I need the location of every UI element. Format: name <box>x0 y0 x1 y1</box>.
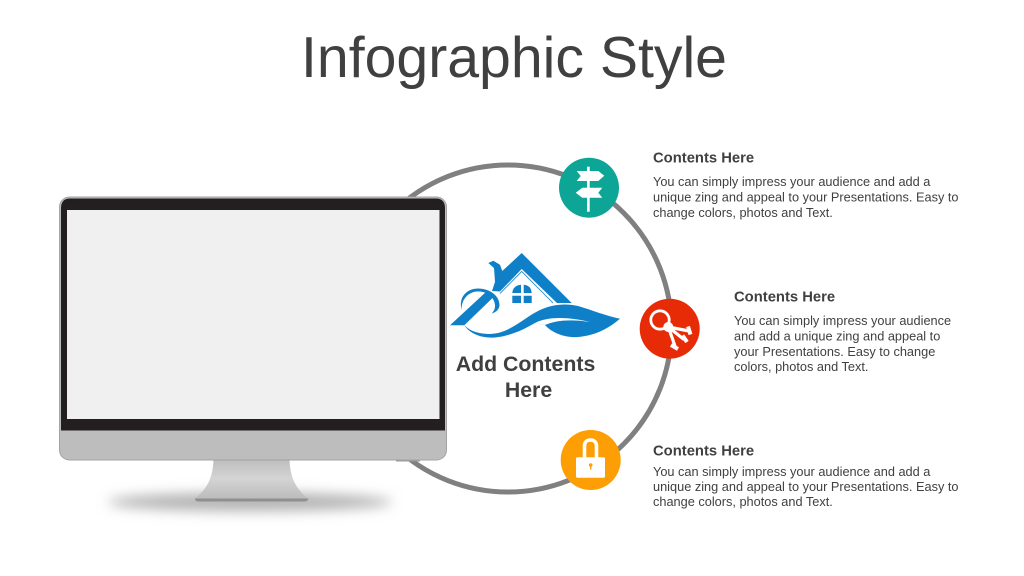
monitor screen <box>67 210 440 419</box>
text block: top <box>653 150 958 220</box>
monitor stand <box>195 459 308 498</box>
monitor tab <box>396 460 420 462</box>
monitor <box>60 197 446 511</box>
icon: keys <box>640 299 700 359</box>
circular ring <box>344 165 672 492</box>
text block: middle <box>734 290 951 374</box>
text block: bottom: unique zing and appeal to your Presentations. Easy to <box>653 479 958 494</box>
text block: bottom: Contents Here <box>653 444 754 460</box>
logo: house and wave <box>450 253 620 338</box>
text block: middle: your Presentations. Easy to change <box>734 344 935 359</box>
icon: signpost <box>559 158 619 218</box>
text block: bottom: You can simply impress your audience and add a <box>653 464 931 479</box>
text block: top: change colors, photos and Text. <box>653 205 833 220</box>
text block: top: unique zing and appeal to your Presentations. Easy to <box>653 190 958 204</box>
magnifier blade <box>450 291 492 325</box>
text block: top: Contents Here <box>653 150 754 166</box>
icon: padlock <box>561 430 621 490</box>
title: Infographic Style <box>301 26 727 90</box>
text block: middle: You can simply impress your audience <box>734 313 951 328</box>
center label: Here <box>505 378 552 402</box>
text block: middle: Contents Here <box>734 290 835 306</box>
text block: middle: and add a unique zing and appeal to <box>734 328 940 344</box>
text block: bottom: change colors, photos and Text. <box>653 494 833 509</box>
text block: middle: colors, photos and Text. <box>734 359 868 374</box>
roof and chimney <box>488 253 572 303</box>
roof inner line <box>500 272 553 303</box>
monitor shadow <box>108 493 392 511</box>
monitor bezel <box>61 198 445 430</box>
monitor body <box>60 197 446 460</box>
text block: bottom <box>653 444 958 509</box>
text block: top: You can simply impress your audience and add a <box>653 174 931 189</box>
magnifier ring <box>461 288 500 314</box>
wave <box>464 304 620 338</box>
wave highlight <box>535 318 590 325</box>
window <box>512 285 532 303</box>
center label: Add Contents <box>456 352 595 376</box>
